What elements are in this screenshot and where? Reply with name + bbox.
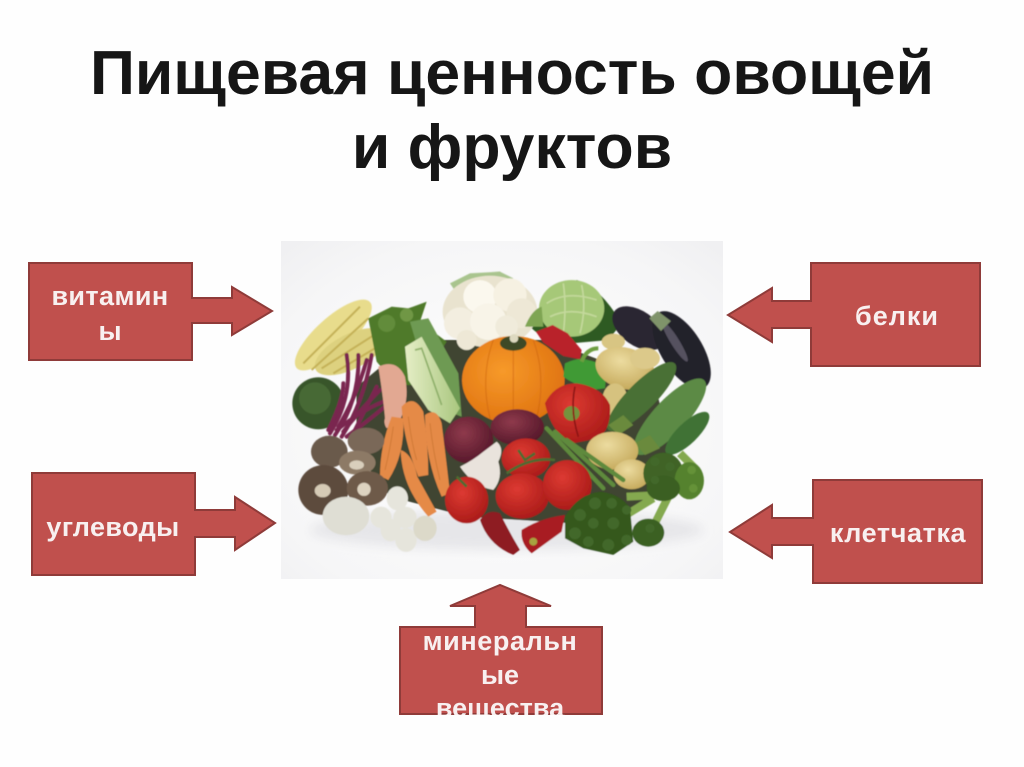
icon: eggplants bbox=[604, 297, 722, 398]
callout: минеральные вещества: минеральн bbox=[423, 626, 577, 656]
callout: витамины: ы bbox=[98, 316, 122, 346]
icon: pumpkin bbox=[462, 334, 565, 424]
icon: white mushrooms bbox=[323, 486, 437, 552]
photo: vegetables bbox=[281, 241, 723, 579]
icon: potatoes bbox=[586, 432, 650, 489]
icon: red onions bbox=[444, 409, 544, 463]
icon: carrot tops bbox=[368, 302, 447, 385]
pile underlay bbox=[357, 340, 673, 523]
callout: белки: белки bbox=[855, 301, 939, 331]
icon: green pepper bbox=[563, 348, 607, 390]
title: Пищевая ценность овощей bbox=[90, 38, 934, 108]
icon: cauliflower bbox=[443, 272, 537, 350]
callout: клетчатка bbox=[730, 480, 982, 583]
icon: tomatoes bbox=[445, 438, 592, 523]
callout: минеральные вещества: ые bbox=[481, 660, 519, 690]
title bbox=[90, 38, 934, 182]
icon: broccoli bbox=[565, 453, 704, 555]
callout: витамины bbox=[29, 263, 272, 360]
icon: corn bbox=[285, 289, 394, 385]
title: и фруктов bbox=[352, 112, 672, 182]
shadow bbox=[310, 510, 703, 550]
icon: savoy cabbage bbox=[525, 280, 622, 345]
icon: leek bbox=[405, 318, 462, 423]
callout: минеральные вещества: вещества bbox=[436, 693, 565, 723]
callout: витамины: витамин bbox=[51, 281, 169, 311]
diagram bbox=[28, 241, 983, 715]
icon: red bell pepper bbox=[545, 383, 610, 443]
icon: garlic bbox=[460, 442, 501, 490]
callout: минеральные вещества bbox=[400, 585, 602, 723]
icon: small red pepper top bbox=[536, 325, 582, 359]
icon: carrots bbox=[380, 401, 450, 517]
callout: углеводы bbox=[32, 473, 275, 575]
icon: pale potatoes bbox=[591, 334, 660, 417]
icon: chilli peppers bbox=[480, 512, 565, 555]
icon: courgettes bbox=[599, 354, 716, 465]
icon: green beans bbox=[547, 428, 623, 488]
icon: avocado bbox=[292, 377, 344, 429]
icon: beetroot stems bbox=[328, 355, 388, 437]
icon: parsnip bbox=[378, 364, 407, 428]
callout: белки bbox=[728, 263, 980, 366]
callout: клетчатка: клетчатка bbox=[830, 518, 967, 548]
callout: углеводы: углеводы bbox=[46, 512, 180, 542]
icon: dark mushrooms bbox=[298, 428, 388, 515]
